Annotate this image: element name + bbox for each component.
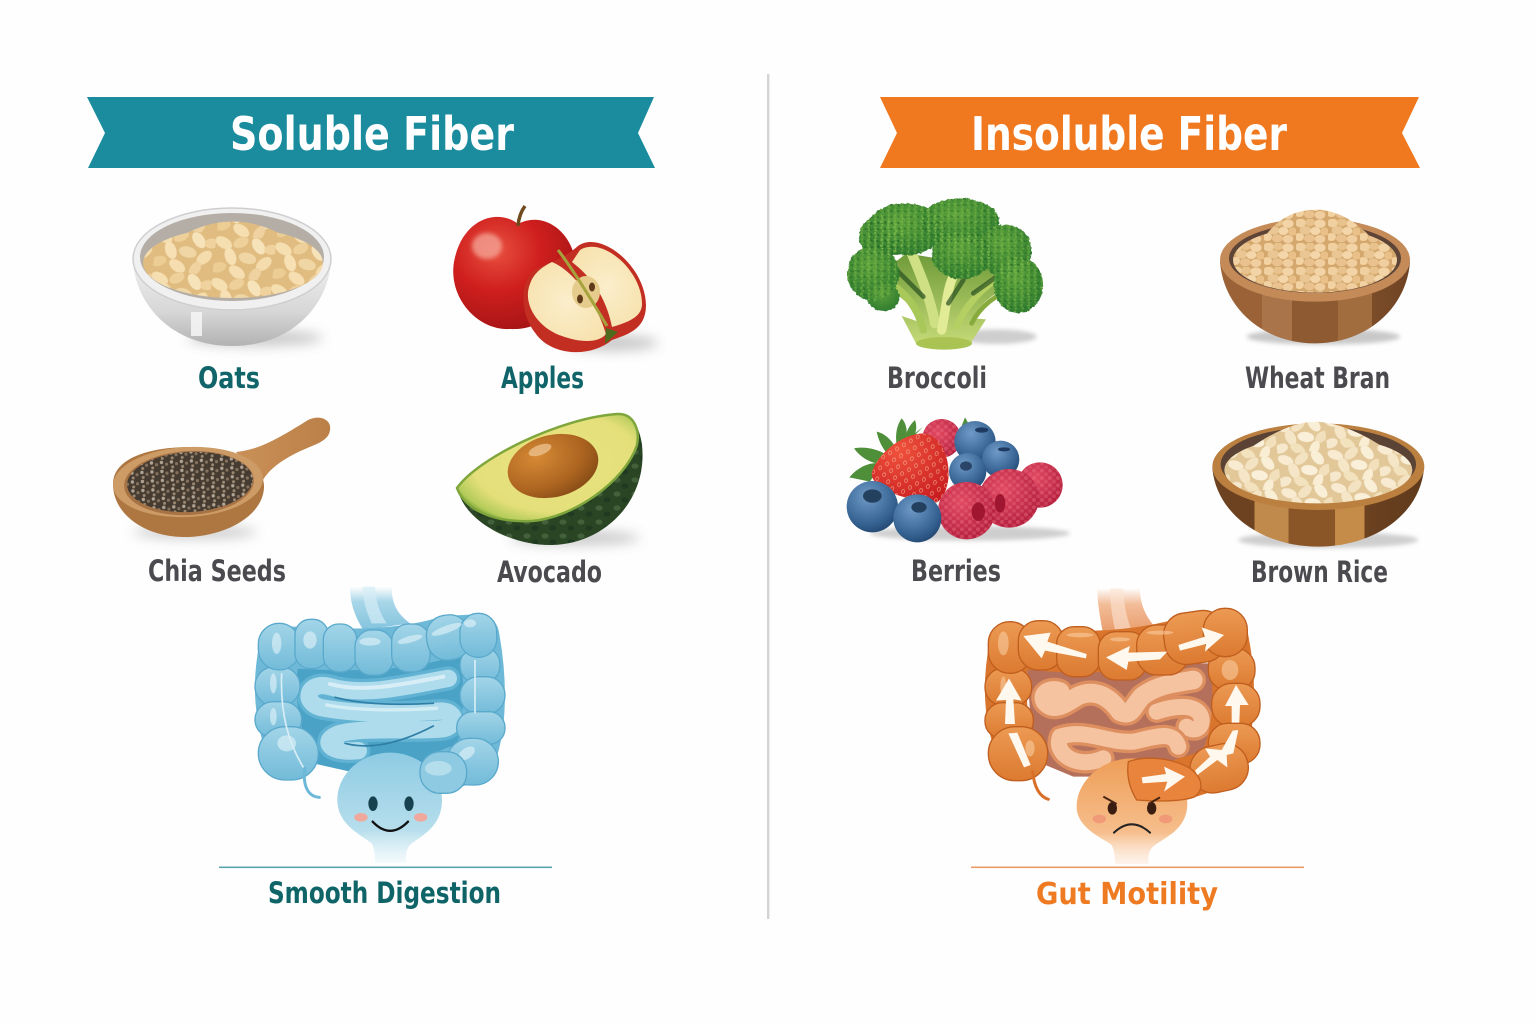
inner cavity: [1027, 663, 1217, 777]
colon highlights: [270, 619, 477, 763]
colon segments: [255, 612, 505, 785]
eyes, brows and frown: [1108, 802, 1117, 815]
appendix: [1033, 772, 1048, 799]
panel: insoluble fiber: [847, 97, 1424, 912]
banner: Soluble Fiber: [87, 97, 655, 168]
label: Apples: Apples: [501, 361, 584, 395]
small intestine: [1044, 680, 1202, 762]
face bulb: [337, 753, 442, 863]
colon band: [1006, 633, 1233, 780]
colon band: [276, 635, 484, 772]
face bulb: [1077, 758, 1187, 864]
colon highlights: [998, 631, 1238, 756]
icon: brown rice bowl: [1212, 422, 1424, 548]
strawberry: [872, 433, 949, 503]
rule: soluble: [219, 866, 552, 868]
label: Oats: Oats: [198, 361, 260, 395]
florets: [847, 198, 1043, 313]
small intestine: [309, 677, 453, 751]
rule: insoluble: [971, 866, 1304, 868]
raspberries: [1017, 462, 1063, 508]
icon: broccoli: [847, 198, 1043, 350]
appendix: [304, 768, 319, 797]
icon: avocado half: [457, 414, 643, 545]
stalks: [875, 253, 1013, 348]
eyes and smile: [368, 796, 378, 811]
blueberries: [954, 421, 996, 462]
banner: Insoluble Fiber: [880, 97, 1420, 168]
icon: chia seeds on spoon: [111, 418, 330, 539]
caption: Gut Motility: Gut Motility: [1036, 877, 1218, 912]
banner: Insoluble Fiber: Insoluble Fiber: [971, 107, 1288, 161]
front blueberries: [847, 481, 898, 532]
caption: Smooth Digestion: Smooth Digestion: [268, 876, 501, 910]
white motion arrows: [996, 627, 1249, 792]
label: Wheat Bran: Wheat Bran: [1245, 361, 1390, 395]
label: Berries: Berries: [911, 554, 1001, 588]
leaves: [849, 417, 969, 482]
icon: oats bowl: [133, 208, 331, 346]
icon: mixed berries: [847, 417, 1070, 542]
panel: soluble fiber: [87, 97, 658, 910]
label: Brown Rice: Brown Rice: [1251, 555, 1388, 589]
icon: apples: [453, 206, 658, 352]
inner cavity: [293, 657, 467, 772]
label: Avocado: Avocado: [497, 555, 602, 589]
esophagus: [350, 587, 410, 630]
illustration: smiling blue intestine: [255, 587, 505, 863]
colon segments: [985, 608, 1260, 797]
banner: Soluble Fiber: Soluble Fiber: [230, 107, 515, 161]
esophagus: [1097, 588, 1153, 635]
label: Chia Seeds: Chia Seeds: [148, 554, 286, 588]
illustration: frowning orange intestine with arrows: [985, 588, 1260, 864]
label: Broccoli: Broccoli: [887, 361, 987, 395]
center divider: [767, 74, 769, 919]
icon: wheat bran bowl: [1220, 210, 1410, 345]
